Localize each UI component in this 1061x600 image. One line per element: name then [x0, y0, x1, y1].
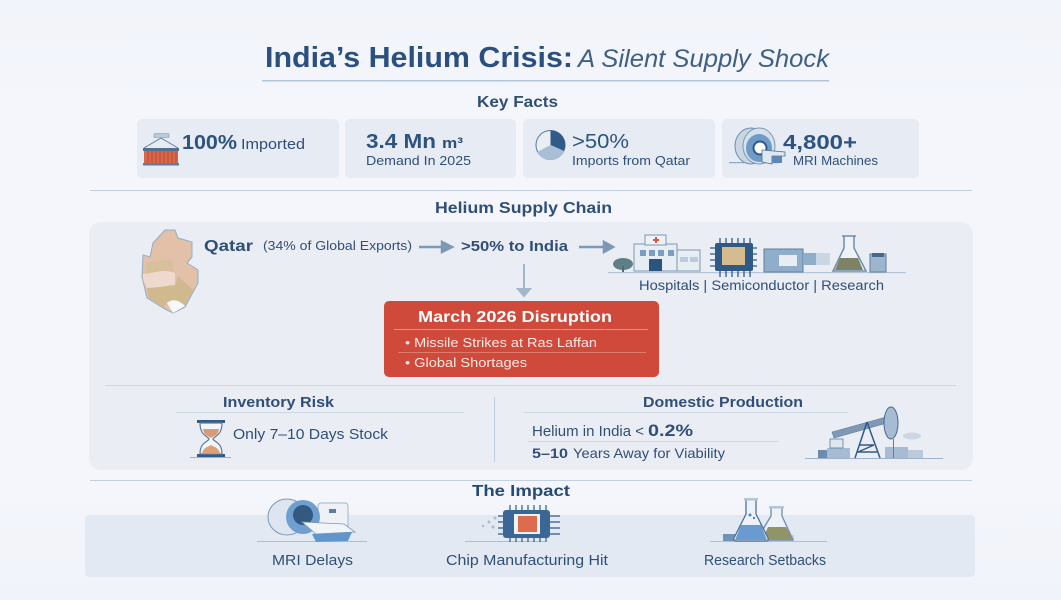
icon: research equipment: [764, 236, 886, 272]
icon: pie chart: [536, 130, 565, 160]
card: 100% imported: [137, 119, 339, 178]
section: domestic production: 0.2%: [648, 421, 693, 440]
title: India’s Helium Crisis:: [265, 42, 573, 74]
callout: March 2026 disruption: • Global Shortages: [405, 355, 528, 370]
heading: key facts: Key Facts: [477, 94, 558, 111]
panel: key facts cards: [137, 119, 919, 178]
card: demand: Demand In 2025: [366, 153, 471, 168]
section: inventory risk: [176, 394, 464, 458]
arrow: to India share: [419, 242, 452, 252]
arrow: to end users: [579, 242, 613, 252]
text: end users: Hospitals | Semiconductor | Research: [639, 278, 884, 293]
text: MRI delays: MRI Delays: [272, 553, 353, 569]
icon: hourglass: [190, 420, 231, 458]
card: demand: m³: [442, 135, 463, 152]
card: MRI machines: [722, 119, 919, 178]
icon: hospital: [608, 235, 906, 273]
card: demand: [345, 119, 516, 178]
section: domestic production: [524, 394, 943, 461]
section: inventory risk: Inventory Risk: [223, 394, 335, 411]
section: domestic production: 5–10: [532, 445, 568, 461]
panel: supply chain: [89, 222, 973, 470]
card: demand: 3.4 Mn: [366, 131, 436, 153]
callout: March 2026 disruption: [384, 301, 659, 377]
callout: March 2026 disruption: March 2026 Disruption: [418, 309, 612, 326]
section: domestic production: Helium in India <: [532, 424, 644, 440]
title: [262, 42, 831, 82]
section: inventory risk: Only 7–10 Days Stock: [233, 426, 389, 443]
card: 100% imported: Imported: [241, 137, 305, 153]
text: share of global exports: (34% of Global Exports): [263, 238, 412, 253]
panel: impact: [85, 498, 975, 577]
section: domestic production: Domestic Production: [643, 394, 803, 411]
card: imports from Qatar: Imports from Qatar: [572, 153, 691, 168]
callout: March 2026 disruption: • Missile Strikes at Ras Laffan: [405, 335, 597, 350]
text: research setbacks: Research Setbacks: [704, 553, 826, 569]
card: imports from Qatar: [523, 119, 715, 178]
heading: the impact: The Impact: [472, 483, 571, 500]
heading: helium supply chain: Helium Supply Chain: [435, 200, 612, 217]
icon: chip: [465, 505, 560, 542]
card: MRI machines: 4,800+: [783, 132, 857, 154]
section: domestic production: Years Away for Viability: [573, 445, 725, 461]
icon: semiconductor chip: [710, 238, 757, 277]
card: 100% imported: 100%: [182, 132, 237, 154]
icon: flasks: [710, 498, 827, 542]
arrow: down to disruption: [518, 264, 530, 296]
text: share to India: >50% to India: [461, 238, 569, 255]
icon: Qatar map: [142, 230, 198, 313]
icon: MRI scanner large: [257, 499, 367, 542]
text: Qatar: Qatar: [204, 238, 253, 255]
icon: oil pumpjack: [805, 407, 943, 459]
text: chip manufacturing hit: Chip Manufacturing Hit: [446, 553, 608, 569]
card: MRI machines: MRI Machines: [793, 153, 879, 168]
icon: MRI scanner: [729, 128, 785, 164]
title: A Silent Supply Shock: [576, 45, 831, 73]
icon: shipping container: [143, 134, 179, 166]
card: imports from Qatar: >50%: [572, 131, 629, 153]
